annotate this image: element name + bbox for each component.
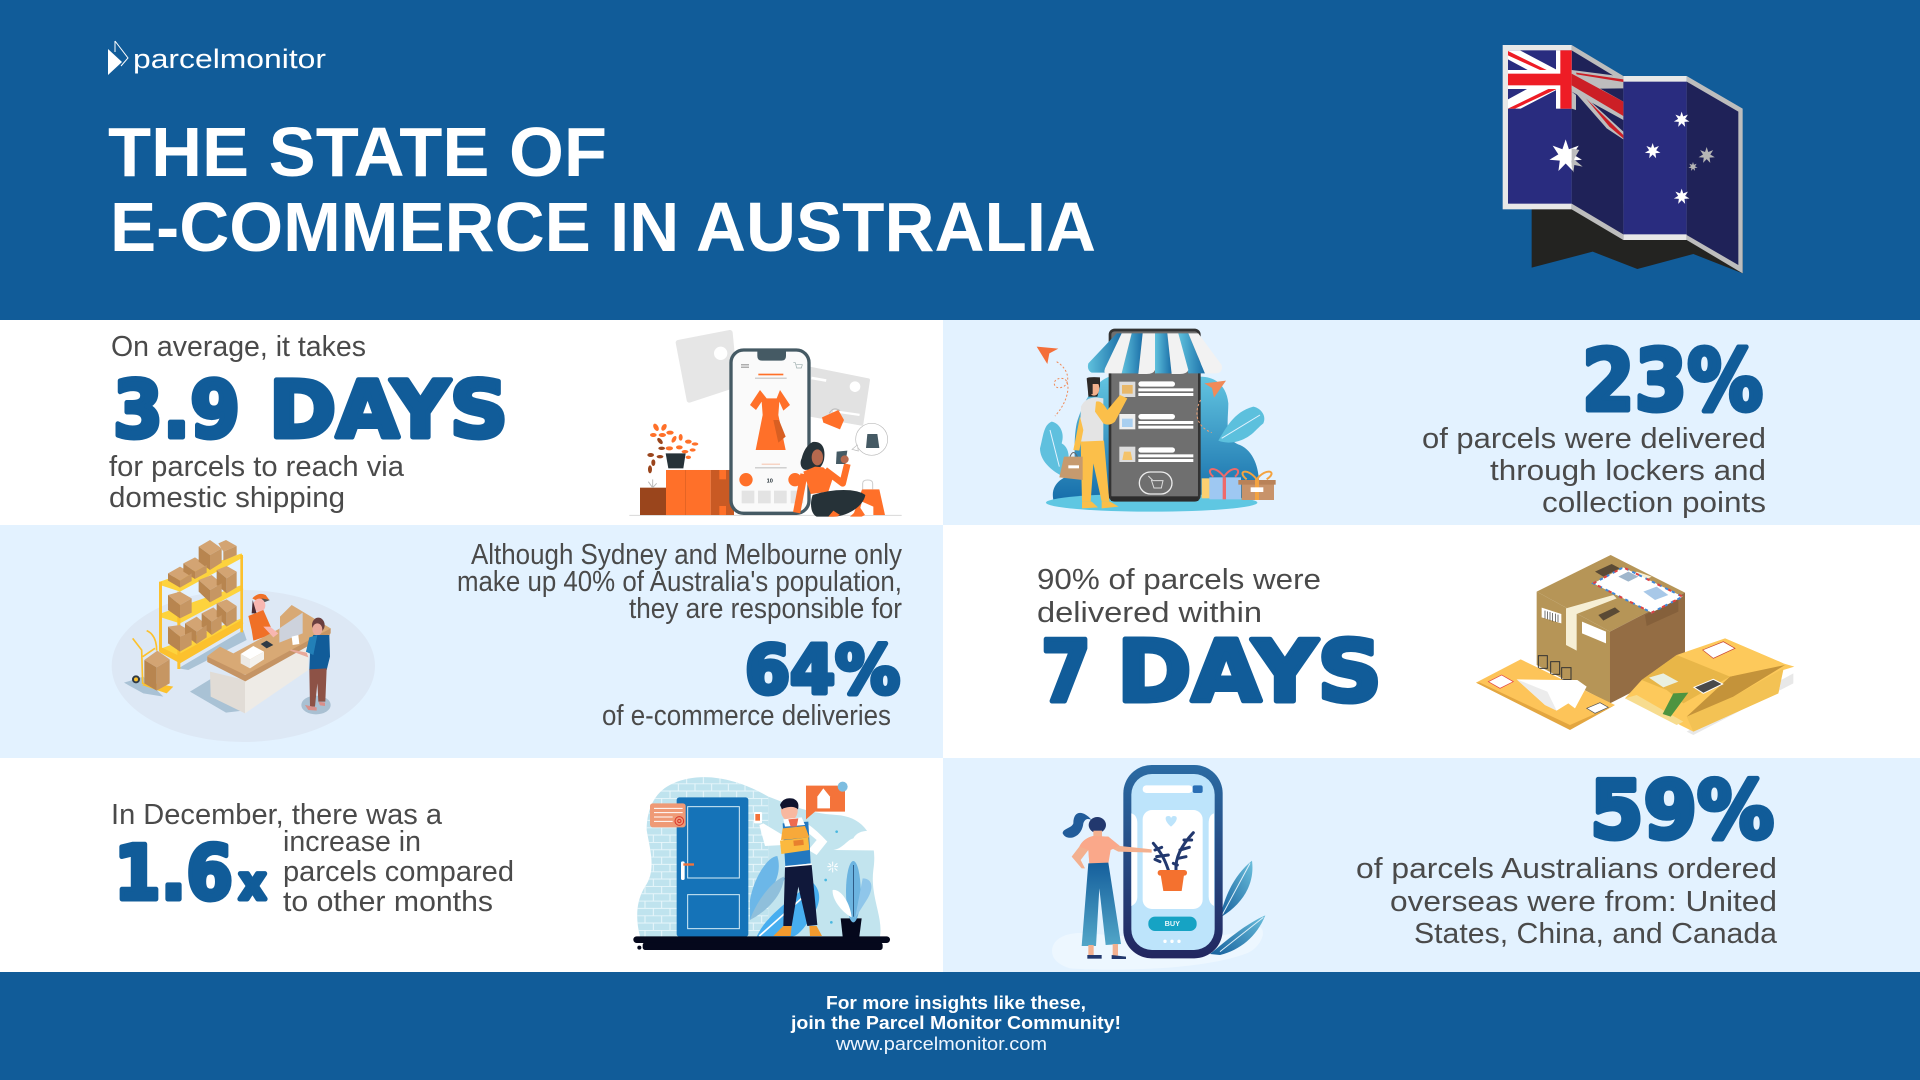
icon: parcels and envelopes illustration <box>1476 555 1794 735</box>
icon: online shopping phone illustration <box>629 333 902 517</box>
text: overseas origin countries: overseas were from: United <box>1390 886 1777 918</box>
panel: 64% of deliveries <box>0 525 943 758</box>
icon: logo arrow <box>108 41 128 75</box>
logo: parcelmonitor <box>108 41 326 75</box>
shelf <box>159 553 243 669</box>
text: domestic shipping: for parcels to reach via <box>109 451 405 483</box>
stat: 59%: 59% <box>1590 764 1774 857</box>
icon: online plant shopping illustration: BUY <box>1165 919 1180 928</box>
text: In December: In December, there was a <box>111 799 443 831</box>
text: on average: On average, it takes <box>111 331 366 363</box>
text: e-commerce deliveries: of e-commerce deliveries <box>602 700 891 732</box>
icon: online plant shopping illustration <box>1052 765 1265 970</box>
text: overseas origin countries: of parcels Australians ordered <box>1356 853 1777 885</box>
stat: 3.9 days <box>113 366 508 456</box>
text: increase in parcels: parcels compared <box>283 856 514 888</box>
customer <box>312 618 325 632</box>
text: overseas origin countries: States, China, and Canada <box>1414 918 1778 950</box>
text: 90% of parcels <box>1037 564 1321 629</box>
text: lockers and collection points: collection points <box>1542 487 1766 519</box>
text: lockers and collection points: of parcels were delivered <box>1422 423 1766 455</box>
stat: 1.6x: x <box>239 856 266 910</box>
clerk <box>252 594 269 603</box>
text: Sydney and Melbourne: Although Sydney and Melbourne only <box>471 539 902 571</box>
icon: delivery at door illustration <box>633 777 897 950</box>
icon: folded Australian flag map <box>1503 45 1743 273</box>
text: Sydney and Melbourne: make up 40% of Australia's population, <box>457 566 902 598</box>
text: increase in parcels <box>283 826 514 918</box>
panel: 90% within 7 days <box>943 525 1920 758</box>
title: THE STATE OF <box>108 113 607 191</box>
text: 90% of parcels: 90% of parcels were <box>1037 564 1321 596</box>
footer call to action: join the Parcel Monitor Community! <box>790 1013 1121 1033</box>
footer url: www.parcelmonitor.com <box>835 1034 1047 1054</box>
text: domestic shipping: domestic shipping <box>109 482 345 514</box>
stat: 3.9 days: DAYS <box>269 366 508 456</box>
text: increase in parcels: to other months <box>283 886 493 918</box>
title <box>108 113 1096 266</box>
panel: 3.9 days domestic shipping <box>0 320 943 525</box>
text: increase in parcels: increase in <box>283 826 421 858</box>
footer call to action <box>790 993 1121 1033</box>
counter <box>210 672 245 713</box>
icon: phone storefront illustration <box>1037 330 1276 512</box>
footer banner <box>0 972 1920 1080</box>
text: lockers and collection points <box>1422 423 1766 519</box>
title: E-COMMERCE IN AUSTRALIA <box>110 188 1096 266</box>
stat: 3.9 days: 3.9 <box>113 366 240 456</box>
text: overseas origin countries <box>1356 853 1778 950</box>
text: domestic shipping <box>109 451 405 514</box>
stat: 1.6x: 1.6 <box>114 829 233 917</box>
header banner <box>0 0 1920 320</box>
stat: 7 days: 7 <box>1041 623 1091 722</box>
logo wordmark: parcelmonitor <box>133 44 326 74</box>
text: 90% of parcels: delivered within <box>1037 597 1262 629</box>
icon: parcel counter illustration <box>112 540 375 742</box>
stat: 7 days: DAYS <box>1117 623 1382 722</box>
stat: 23%: 23% <box>1582 332 1763 431</box>
footer call to action: For more insights like these, <box>826 993 1086 1013</box>
stat: 64%: 64% <box>745 631 900 709</box>
text: Sydney and Melbourne: they are responsible for <box>629 593 902 625</box>
panel: 1.6x December increase <box>0 758 943 972</box>
trolley <box>133 631 167 692</box>
panel: 59% overseas orders <box>943 758 1920 972</box>
icon: online shopping phone illustration: 10 <box>767 478 773 484</box>
text: lockers and collection points: through lockers and <box>1490 455 1766 487</box>
panel: 23% lockers and collection points <box>943 320 1920 525</box>
text: Sydney and Melbourne <box>457 539 902 625</box>
